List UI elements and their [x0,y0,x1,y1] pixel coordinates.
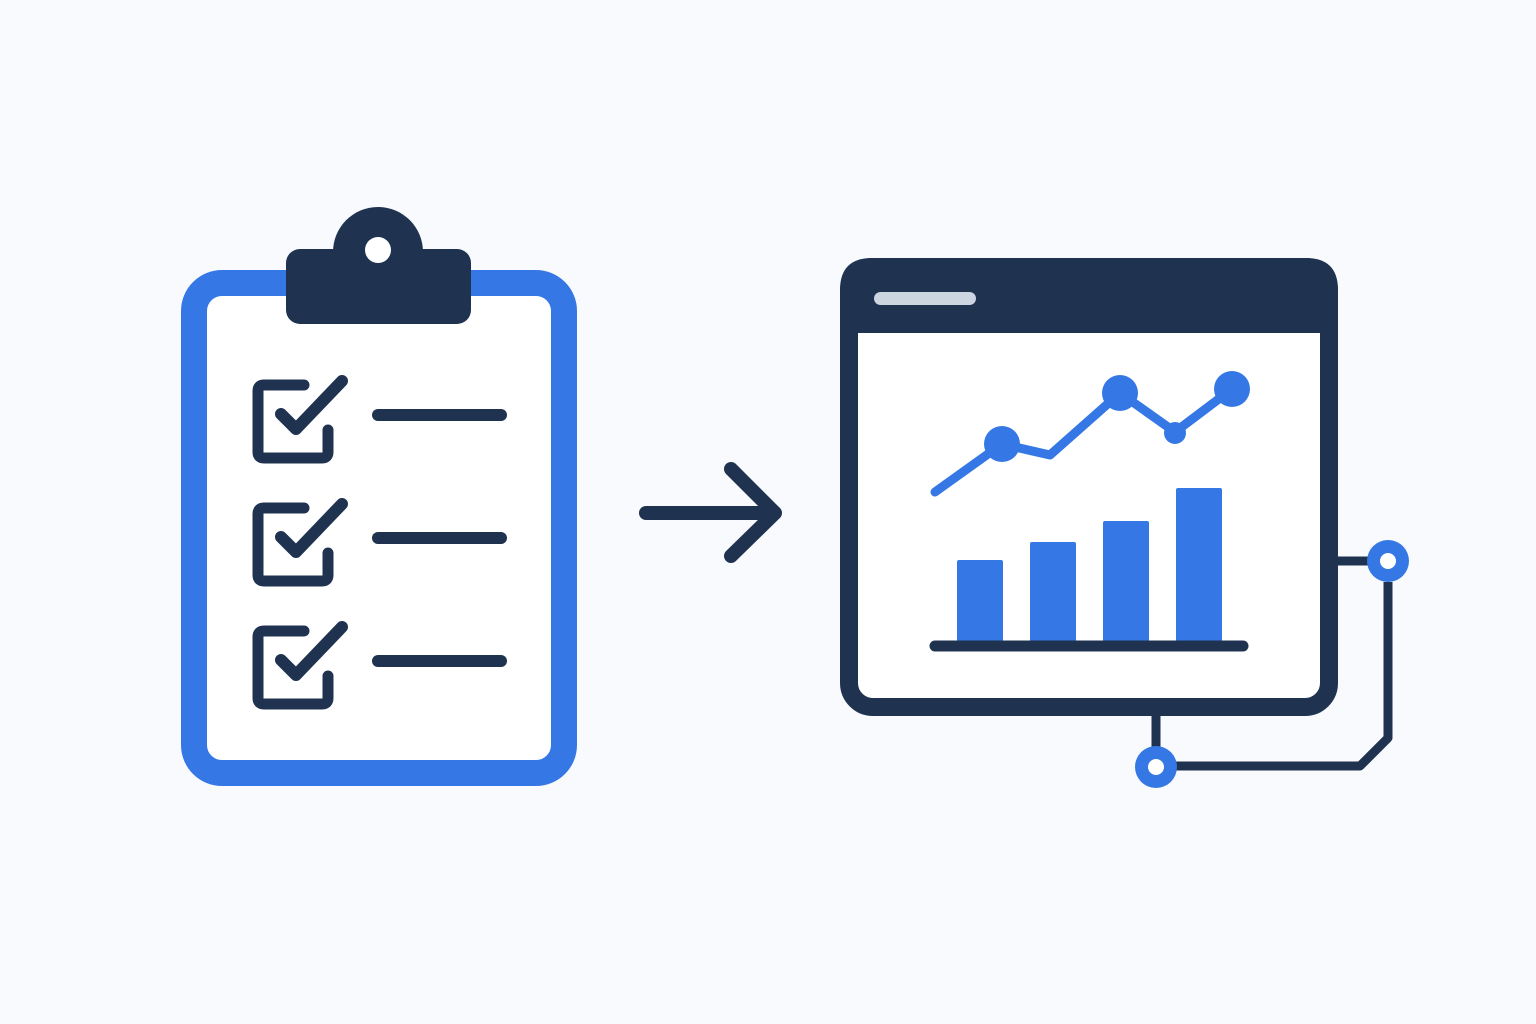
checklist item 3 [258,627,501,704]
window header bar [840,258,1338,333]
icon: clipboard checklist [194,207,564,773]
node bottom [1135,746,1177,788]
bar chart [935,488,1243,646]
checklist item 1 [258,381,501,458]
clipboard clip [286,207,471,324]
line chart [935,371,1250,492]
node right [1367,540,1409,582]
connector network [1135,540,1409,788]
checklist item 2 [258,504,501,581]
icon: dashboard window with charts [840,258,1338,707]
arrow [646,469,775,556]
